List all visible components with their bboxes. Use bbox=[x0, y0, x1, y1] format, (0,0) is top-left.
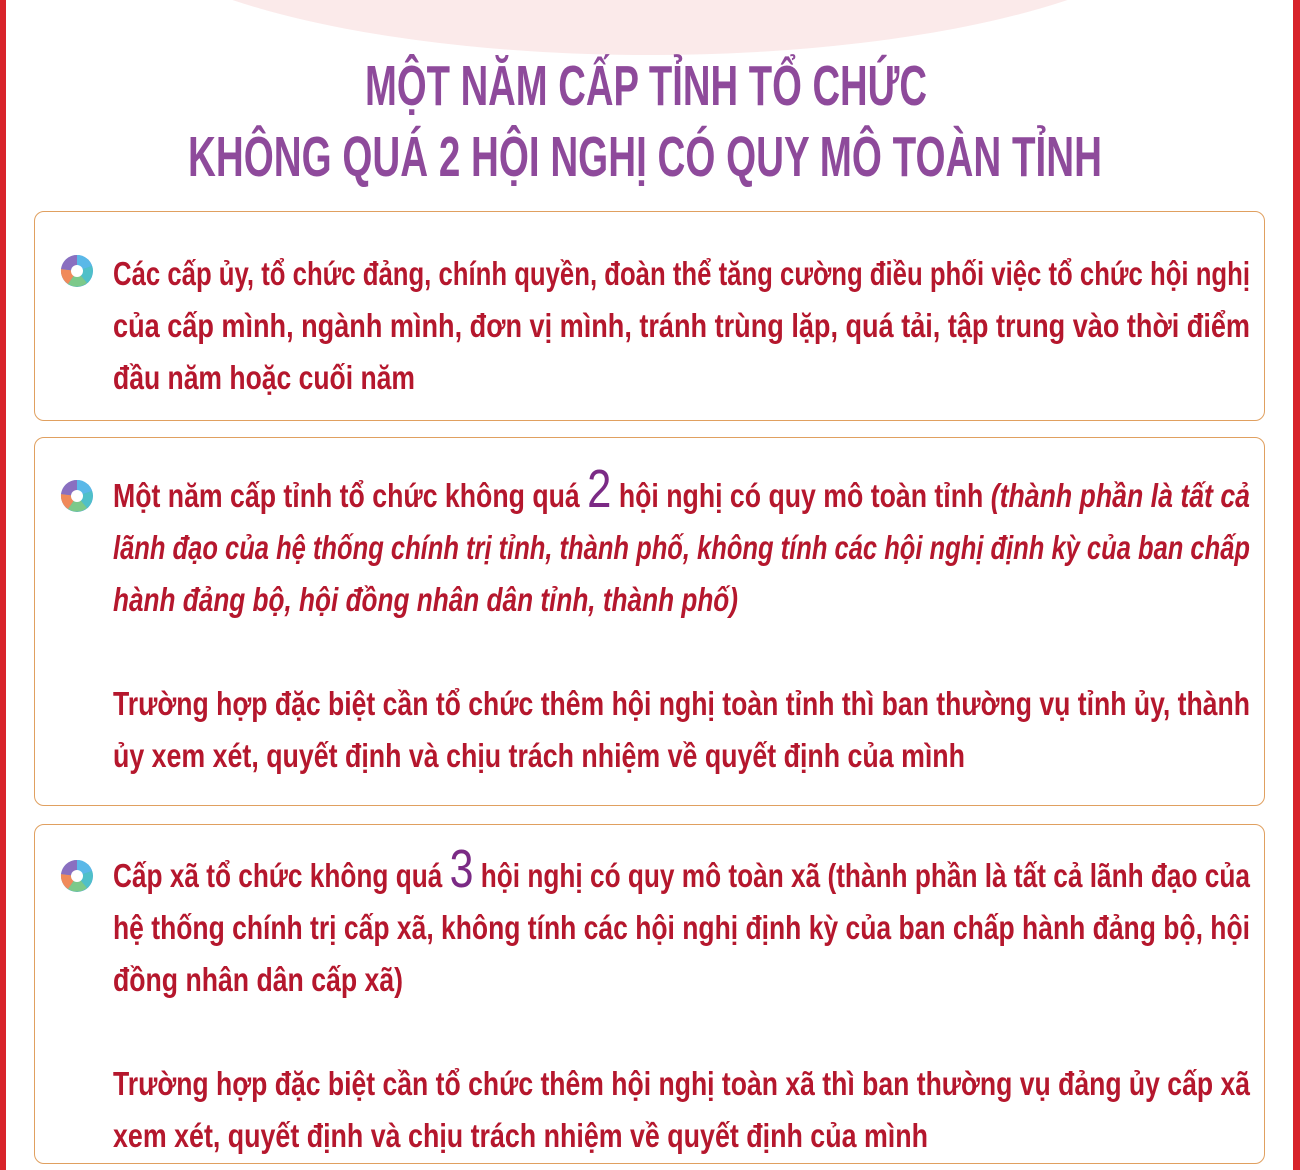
title: MỘT NĂM CẤP TỈNH TỔ CHỨC bbox=[365, 53, 927, 118]
panel: box 1 bbox=[34, 211, 1265, 421]
text: box 1: đầu năm hoặc cuối năm bbox=[113, 359, 415, 396]
panel: box 3 bbox=[34, 824, 1265, 1164]
icon: bullet 3 bbox=[61, 860, 93, 892]
text: box 3: xem xét, quyết định và chịu trách nhiệm về quyết định của mình bbox=[113, 1117, 928, 1154]
text: box 1 bbox=[113, 255, 1250, 396]
text: box 2 bbox=[113, 459, 1250, 774]
text: box 2: hành đảng bộ, hội đồng nhân dân tỉnh, thành phố) bbox=[113, 581, 738, 618]
top decorative arc bbox=[100, 0, 1200, 55]
title bbox=[188, 53, 1102, 189]
text: box 3 bbox=[113, 839, 1251, 1154]
text: box 3: đồng nhân dân cấp xã) bbox=[113, 961, 403, 998]
panel: box 2 bbox=[34, 437, 1265, 806]
text: box 2: ủy xem xét, quyết định và chịu trách nhiệm về quyết định của mình bbox=[113, 737, 965, 774]
icon: bullet 2 bbox=[61, 480, 93, 512]
icon: bullet 1 bbox=[61, 255, 93, 287]
text: box 2: Một năm cấp tỉnh tổ chức không quá 2 hội nghị có quy mô toàn tỉnh (thành phần là tất cả bbox=[113, 459, 1250, 519]
